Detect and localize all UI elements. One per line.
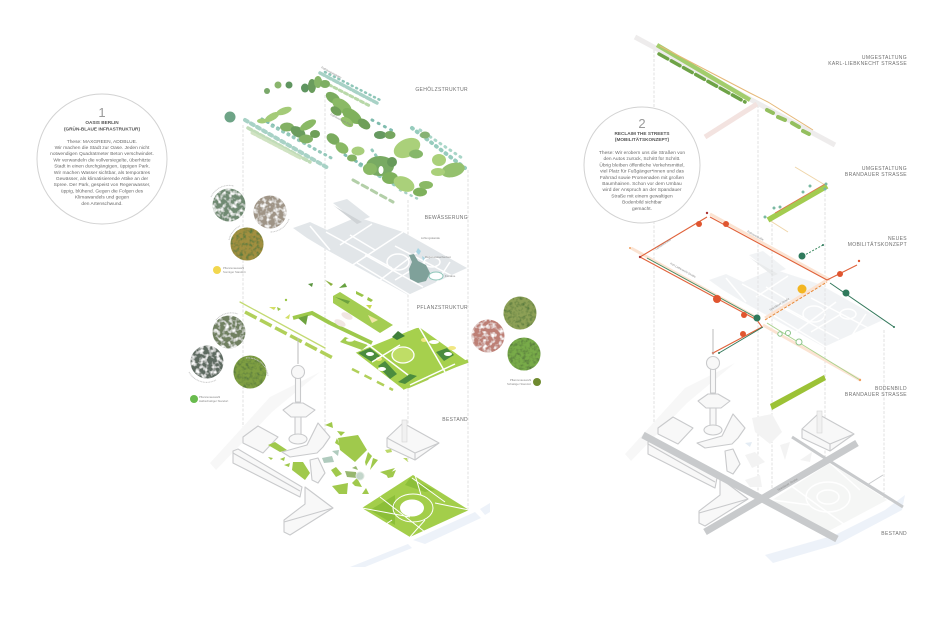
plant photos group half shade: Pflanzenauswahl bbox=[199, 395, 221, 399]
road network bbox=[643, 435, 903, 539]
plant photos group half shade bbox=[189, 313, 268, 403]
panel: intro circle 1: OASIS BERLIN bbox=[85, 120, 119, 125]
mobility network: Karl-Liebknecht-Straße bbox=[670, 261, 697, 279]
panel: intro circle 1: Wir machen die Stadt zur Oase. Jeden nicht bbox=[55, 145, 150, 151]
existing park bbox=[362, 475, 469, 537]
panel: intro circle 1: 1 bbox=[98, 105, 106, 120]
label: KARL-LIEBKNECHT STRASSE bbox=[828, 61, 907, 67]
transit stops bbox=[629, 212, 861, 381]
panel: intro circle 2: (MOBILITÄTSKONZEPT) bbox=[615, 136, 670, 142]
tree canopies bbox=[224, 76, 466, 196]
plant photos group shade: Schattiger Standort bbox=[507, 382, 531, 386]
planted park bbox=[355, 327, 468, 390]
layer: existing green pieces bbox=[268, 422, 408, 494]
panel: intro circle 2 bbox=[584, 107, 700, 223]
panel: intro circle 1: Wir verwandeln die vollversiegelte, überhitzte bbox=[53, 157, 151, 163]
plant photos group sunny bbox=[211, 185, 289, 274]
river bbox=[350, 503, 490, 567]
panel: intro circle 1: den Artenschwund. bbox=[81, 201, 123, 207]
vertical guide lines left bbox=[243, 95, 468, 510]
label: NEUES bbox=[888, 236, 907, 242]
strips bbox=[240, 302, 468, 390]
layer: irrigation map bbox=[293, 199, 467, 295]
river right bbox=[765, 495, 905, 563]
panel: intro circle 2: den Autos zurück, Schritt für Schritt. bbox=[604, 156, 680, 162]
mobility network bbox=[629, 212, 895, 381]
label bbox=[828, 55, 907, 67]
label: PFLANZSTRUKTUR bbox=[417, 305, 468, 311]
panel: intro circle 1: Wir machen Wasser sichtbar, als temporäres bbox=[54, 170, 151, 176]
street redesign Brandauer bbox=[764, 167, 828, 232]
panel: intro circle 1: üppig, blühend. Gegen die Folgen des bbox=[61, 188, 144, 194]
panel: intro circle 2: 2 bbox=[638, 116, 646, 131]
mobility network: Spandauer Straße bbox=[768, 296, 790, 312]
layer: tree structure: Rathausforum Park bbox=[330, 112, 353, 127]
panel: intro circle 1: These: MAXGREEN, ADDBLUE. bbox=[67, 139, 137, 145]
panel: intro circle 2: Straße mit einem gewaltigen bbox=[611, 193, 673, 199]
existing buildings right bbox=[625, 329, 854, 526]
label: BESTAND bbox=[881, 531, 907, 537]
label: BESTAND bbox=[442, 417, 468, 423]
panel: intro circle 2: Baumhainen. Schon vor dem Umbau bbox=[602, 181, 682, 187]
panel: intro circle 2: viel Platz für Fußgänger*innen und das bbox=[600, 169, 684, 175]
plant photos group shade: Pflanzenauswahl bbox=[510, 378, 531, 382]
water features: Regenwasserbecken bbox=[425, 255, 452, 259]
pale block pieces right bbox=[745, 414, 812, 487]
floor mural strip bbox=[770, 375, 826, 410]
plant photos group sunny: Pflanzenauswahl bbox=[223, 266, 245, 270]
panel: intro circle 2: Übrig bleiben öffentliche Verkehrsmittel, bbox=[599, 161, 685, 168]
panel: intro circle 2: RECLAIM THE STREETS bbox=[615, 131, 669, 136]
panel: intro circle 1: Klimawandels und gegen bbox=[75, 195, 129, 201]
road name: Spandauer Straße bbox=[776, 477, 799, 492]
panel: intro circle 2: wird der Anspruch an der Spandauer bbox=[603, 187, 682, 193]
panel: intro circle 2: Bodenbild sichtbar bbox=[622, 200, 662, 206]
label bbox=[845, 386, 907, 398]
label: UMGESTALTUNG bbox=[862, 55, 907, 61]
plant photos group sunny: Sonniger Standort bbox=[223, 270, 246, 274]
tree annotations: Rathauspassagen bbox=[321, 65, 343, 80]
base map under mobility concept bbox=[709, 251, 883, 347]
street names: Gontardstraße bbox=[654, 237, 672, 251]
label bbox=[848, 236, 907, 248]
layer: existing buildings left bbox=[210, 338, 439, 535]
panel: intro circle 1 bbox=[37, 94, 167, 224]
green strip bbox=[333, 292, 393, 333]
label: BRANDAUER STRASSE bbox=[845, 172, 907, 178]
water features: Fontäne bbox=[445, 274, 456, 278]
small planting fragments bbox=[269, 280, 373, 319]
label bbox=[845, 166, 907, 178]
layer: tree structure bbox=[224, 65, 466, 202]
mobility network: Rathausstraße bbox=[747, 229, 765, 242]
label: MOBILITÄTSKONZEPT bbox=[848, 241, 907, 248]
layer: plant structure bbox=[240, 280, 468, 390]
panel: intro circle 1: Gewässer, als klimatisierende Attike an der bbox=[56, 176, 149, 182]
street redesign Karl-Liebknecht bbox=[635, 37, 835, 145]
TV tower bbox=[282, 338, 330, 483]
water features: Lüftungskanäle bbox=[421, 236, 440, 240]
label: BODENBILD bbox=[875, 386, 907, 392]
panel: intro circle 1: notwendigen Quadratmeter Beton verschwindet. bbox=[50, 151, 154, 157]
panel: intro circle 2: Fahrrad sowie Promenaden mit großen bbox=[600, 175, 684, 181]
label: UMGESTALTUNG bbox=[862, 166, 907, 172]
panel: intro circle 1: Spree. Der Park, gespeist von Regenwasser, bbox=[54, 182, 150, 188]
panel: intro circle 2: These: Wir erobern uns die Straßen von bbox=[599, 150, 685, 156]
panel: intro circle 1: Stadt in einen durchgängigen, üppigen Park. bbox=[54, 164, 150, 170]
label: BEWÄSSERUNG bbox=[425, 214, 468, 221]
panel: intro circle 2: gemacht. bbox=[632, 206, 652, 212]
tree dots rows bbox=[245, 72, 465, 202]
plant photos group half shade: Halbschattiger Standort bbox=[199, 399, 228, 403]
plant photos group shade bbox=[472, 296, 541, 386]
panel: intro circle 1: (GRÜN-BLAUE INFRASTRUKTUR) bbox=[64, 126, 140, 132]
existing park right bbox=[772, 463, 887, 533]
vertical guide lines right bbox=[654, 50, 884, 500]
label: BRANDAUER STRASSE bbox=[845, 392, 907, 398]
label: GEHÖLZSTRUKTUR bbox=[415, 86, 468, 93]
water features bbox=[409, 236, 456, 283]
